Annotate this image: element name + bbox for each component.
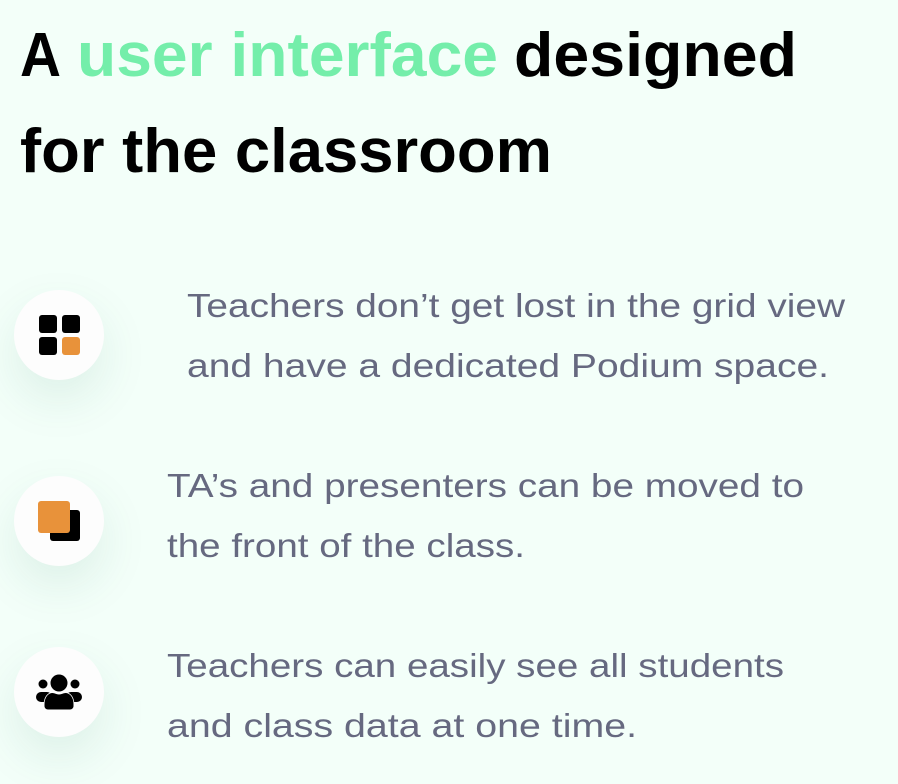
icon: people [36,674,82,710]
icon: layers [38,501,80,541]
text: class data [167,647,784,744]
title: designed [514,21,797,90]
text: podium [187,287,845,384]
text: podium: and have a dedicated Podium space. [187,347,829,384]
title [20,21,797,186]
text: class data: Teachers can easily see all students [167,647,784,684]
title: for the classroom [20,117,552,186]
text: presenters: TA’s and presenters can be moved to [167,467,804,504]
icon circle: grid [14,290,104,380]
icon: grid [39,315,80,355]
title: A [20,21,61,90]
icon circle: people [14,647,104,737]
text: podium: Teachers don’t get lost in the grid view [187,287,845,324]
title: user interface [77,21,498,90]
text: presenters: the front of the class. [167,527,525,564]
icon circle: layers [14,476,104,566]
text: presenters [167,467,804,564]
text: class data: and class data at one time. [167,707,637,744]
